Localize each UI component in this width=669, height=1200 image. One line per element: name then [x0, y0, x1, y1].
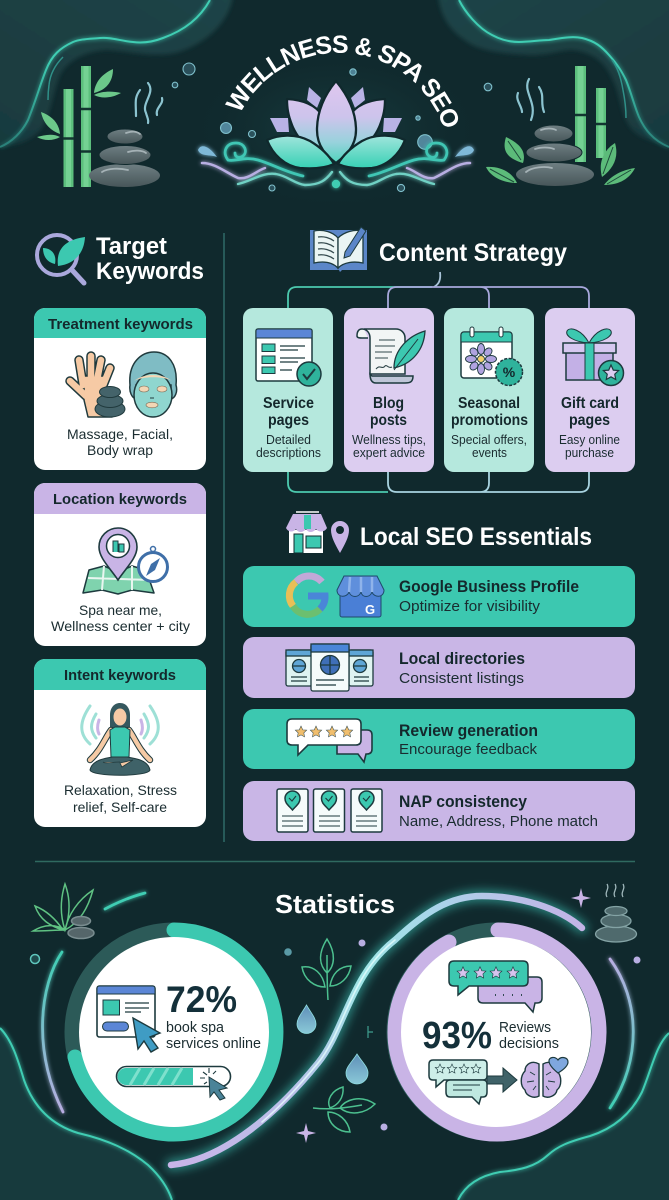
corner decoration: top left: [0, 0, 233, 147]
stat: 72% book spa services online: [72, 930, 276, 1134]
card: service pages: pages: [268, 412, 309, 429]
bubbles: [172, 63, 492, 192]
icon: magnifier with leaves: [37, 235, 85, 283]
icon: scroll and quill: [357, 329, 425, 383]
bottom blobs and curves: [0, 1028, 669, 1200]
card: treatment keywords: Massage, Facial,: [67, 426, 173, 442]
card: intent keywords: relief, Self-care: [73, 799, 167, 815]
card: seasonal promotions: Special offers,: [451, 433, 527, 447]
row: NAP consistency: [243, 781, 635, 841]
section: target keywords: [34, 233, 206, 827]
illustration: right bamboo and stones: [468, 66, 635, 188]
row: NAP consistency: Name, Address, Phone match: [399, 813, 598, 830]
corner decoration: top right: [438, 0, 669, 147]
icon: hand and stones: [70, 356, 125, 417]
card: blog posts: [344, 308, 434, 472]
stat: 93% reviews decisions: decisions: [499, 1036, 559, 1052]
card: intent keywords: [34, 659, 206, 827]
card: service pages: Service: [263, 395, 314, 412]
icon: web page with check: [256, 329, 321, 386]
icon: lotus flower: [267, 81, 405, 168]
heading: local SEO essentials: Local SEO Essentials: [360, 523, 592, 551]
row: review generation: [243, 709, 635, 769]
icon: three directory pages: [286, 644, 373, 691]
heading: target keywords: Keywords: [96, 258, 204, 285]
card: treatment keywords: Treatment keywords: [48, 316, 193, 333]
card: location keywords: Spa near me,: [79, 602, 162, 618]
card: gift card pages: [545, 308, 635, 472]
row: review generation: Review generation: [399, 722, 538, 740]
heading: target keywords: Target: [96, 233, 167, 260]
card: intent keywords: Relaxation, Stress: [64, 782, 177, 798]
card: location keywords: Location keywords: [53, 491, 187, 508]
stat: 93% reviews decisions: [394, 930, 599, 1134]
heading: statistics: Statistics: [275, 889, 395, 919]
card: seasonal promotions: events: [472, 446, 507, 460]
card: blog posts: Blog: [373, 395, 404, 412]
icon: calendar with flower and badge: [461, 327, 522, 386]
icon: calendar with flower and badge: %: [503, 364, 516, 380]
stat: 72% book spa services online: 72%: [166, 979, 237, 1020]
illustration: left bamboo and stones: [35, 66, 202, 188]
stat: 72% book spa services online: book spa: [166, 1020, 225, 1036]
icon: reviews to brain: [429, 1057, 568, 1104]
row: NAP consistency: NAP consistency: [399, 793, 528, 811]
card: gift card pages: Gift card: [561, 395, 619, 412]
icon: open book and pen: [310, 227, 367, 272]
accent arcs: [43, 893, 633, 1112]
row: review generation: Encourage feedback: [399, 741, 537, 758]
connectors: [288, 272, 589, 492]
row: google business profile: Google Business Profile: [399, 578, 579, 596]
heading: target keywords: [96, 233, 204, 285]
icon: face mask: [130, 352, 177, 417]
row: local directories: Local directories: [399, 650, 525, 668]
card: location keywords: Wellness center + city: [51, 618, 190, 634]
decoration: right stones with steam: [596, 884, 636, 942]
icon: web page with cursor: [97, 986, 160, 1052]
card: gift card pages: Easy online: [559, 433, 620, 447]
decoration: leaf sprigs and water drops: [297, 939, 375, 1132]
lotus glow: [186, 43, 486, 213]
card: gift card pages: pages: [569, 412, 610, 429]
row: google business profile: Optimize for visibility: [399, 598, 541, 615]
row: local directories: Consistent listings: [399, 670, 524, 687]
card: blog posts: Wellness tips,: [352, 433, 426, 447]
icon: progress bar with cursor: [116, 1066, 230, 1100]
row: google business profile: [243, 566, 635, 627]
decoration: dots and sparkles: [30, 888, 640, 1143]
stat: 93% reviews decisions: Reviews: [499, 1020, 551, 1036]
icon: map, pin and compass: [83, 528, 168, 594]
card: location keywords: [34, 483, 206, 646]
icon: top review bubbles: [449, 961, 542, 1012]
section: content strategy: [243, 227, 635, 492]
heading: content strategy: Content Strategy: [379, 239, 567, 267]
card: gift card pages: purchase: [565, 446, 614, 460]
icon: three verified documents: [277, 789, 382, 832]
decoration: left plant and stones: [33, 884, 94, 938]
icon: meditating woman: [82, 703, 158, 775]
stat: 72% book spa services online: services online: [166, 1036, 261, 1052]
icon: google G and store: G: [365, 602, 375, 617]
icon: review bubbles: [287, 719, 372, 762]
card: service pages: Detailed: [266, 433, 311, 447]
card: service pages: descriptions: [256, 446, 321, 460]
card: blog posts: expert advice: [353, 446, 425, 460]
row: local directories: [243, 637, 635, 698]
card: blog posts: posts: [370, 412, 407, 429]
stat: 93% reviews decisions: 93%: [422, 1015, 492, 1057]
section: local SEO essentials: [243, 512, 635, 841]
flowing S curve: [171, 896, 582, 1165]
icon: storefront and pin: [286, 512, 349, 553]
card: treatment keywords: [34, 308, 206, 470]
card: treatment keywords: Body wrap: [87, 442, 153, 458]
card: service pages: [243, 308, 333, 472]
card: intent keywords: Intent keywords: [64, 667, 176, 684]
waves under lotus: [198, 143, 474, 188]
title: WELLNESS & SPA SEO: [225, 35, 458, 127]
icon: gift box with star: [563, 329, 624, 386]
card: seasonal promotions: Seasonal: [458, 395, 520, 412]
card: seasonal promotions: [444, 308, 534, 472]
icon: google G and store: [289, 576, 384, 617]
column divider: [223, 233, 225, 842]
card: seasonal promotions: promotions: [451, 412, 528, 429]
